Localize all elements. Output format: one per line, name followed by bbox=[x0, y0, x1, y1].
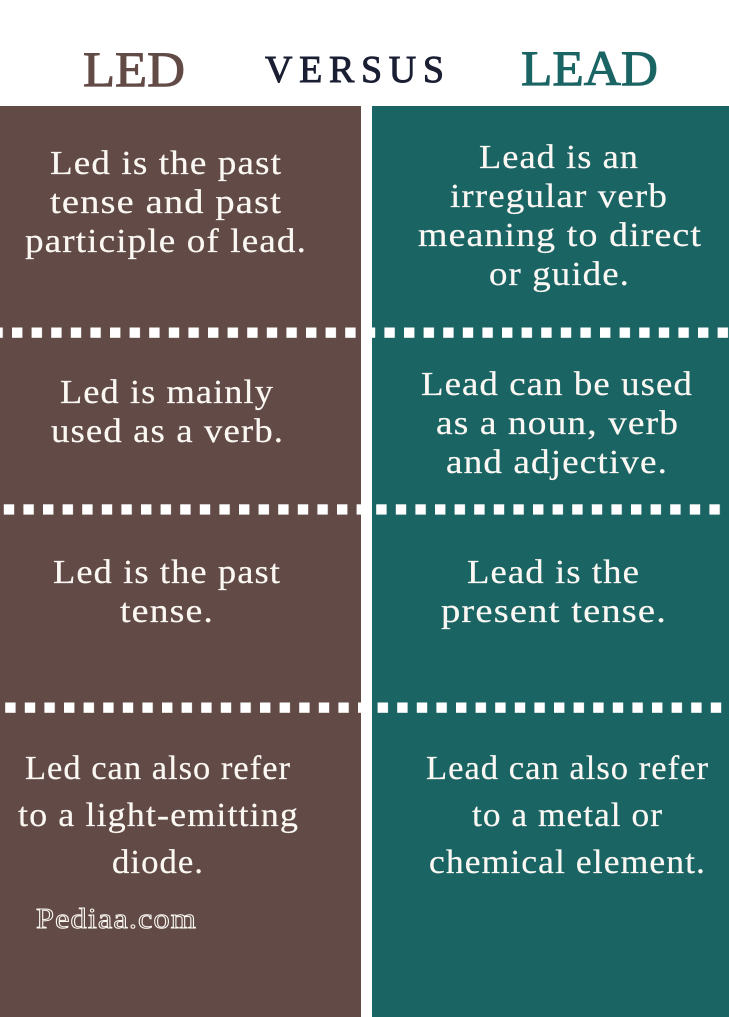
text: LEAD part of speech: and adjective. bbox=[446, 444, 668, 481]
panel: LEAD column bbox=[372, 106, 729, 1017]
text: LEAD other meaning: to a metal or bbox=[472, 797, 663, 834]
text: LED other meaning bbox=[18, 750, 299, 881]
panel: LED column bbox=[0, 106, 361, 1017]
divider row 3 bbox=[0, 702, 729, 713]
text: LEAD other meaning: Lead can also refer bbox=[426, 750, 709, 787]
text: LEAD other meaning bbox=[426, 750, 709, 881]
heading: LEAD: LEAD bbox=[521, 40, 658, 96]
text: LED definition: Led is the past bbox=[50, 145, 282, 182]
text: LEAD definition bbox=[418, 139, 702, 293]
text: LED tense: tense. bbox=[120, 593, 214, 630]
text: LED part of speech: used as a verb. bbox=[51, 413, 284, 450]
text: LEAD part of speech bbox=[421, 366, 693, 481]
text: LED other meaning: diode. bbox=[112, 844, 204, 881]
text: LED definition: participle of lead. bbox=[25, 223, 307, 260]
heading: LED: LED bbox=[83, 41, 185, 97]
text: LEAD part of speech: as a noun, verb bbox=[436, 405, 679, 442]
text: LEAD tense bbox=[441, 554, 667, 630]
text: LED part of speech bbox=[51, 374, 284, 450]
divider row 2 bbox=[0, 504, 729, 515]
text: LEAD definition: Lead is an bbox=[479, 139, 639, 176]
text: LEAD definition: irregular verb bbox=[450, 178, 668, 215]
text: LEAD part of speech: Lead can be used bbox=[421, 366, 693, 403]
text: LEAD definition: meaning to direct bbox=[418, 217, 702, 254]
text: LED tense bbox=[53, 554, 281, 630]
text: LEAD other meaning: chemical element. bbox=[429, 844, 706, 881]
text: LEAD tense: present tense. bbox=[441, 593, 667, 630]
text: LED other meaning: to a light-emitting bbox=[18, 797, 299, 834]
divider row 1 bbox=[0, 328, 729, 338]
text: LED other meaning: Led can also refer bbox=[25, 750, 291, 787]
watermark: Pediaa.com: Pediaa.com bbox=[36, 903, 197, 935]
text: LED definition bbox=[25, 145, 307, 260]
text: LED part of speech: Led is mainly bbox=[60, 374, 274, 411]
heading: VERSUS: VERSUS bbox=[265, 49, 444, 91]
text: LEAD definition: or guide. bbox=[489, 256, 630, 293]
text: LED tense: Led is the past bbox=[53, 554, 281, 591]
text: LED definition: tense and past bbox=[50, 184, 282, 221]
text: LEAD tense: Lead is the bbox=[467, 554, 640, 591]
